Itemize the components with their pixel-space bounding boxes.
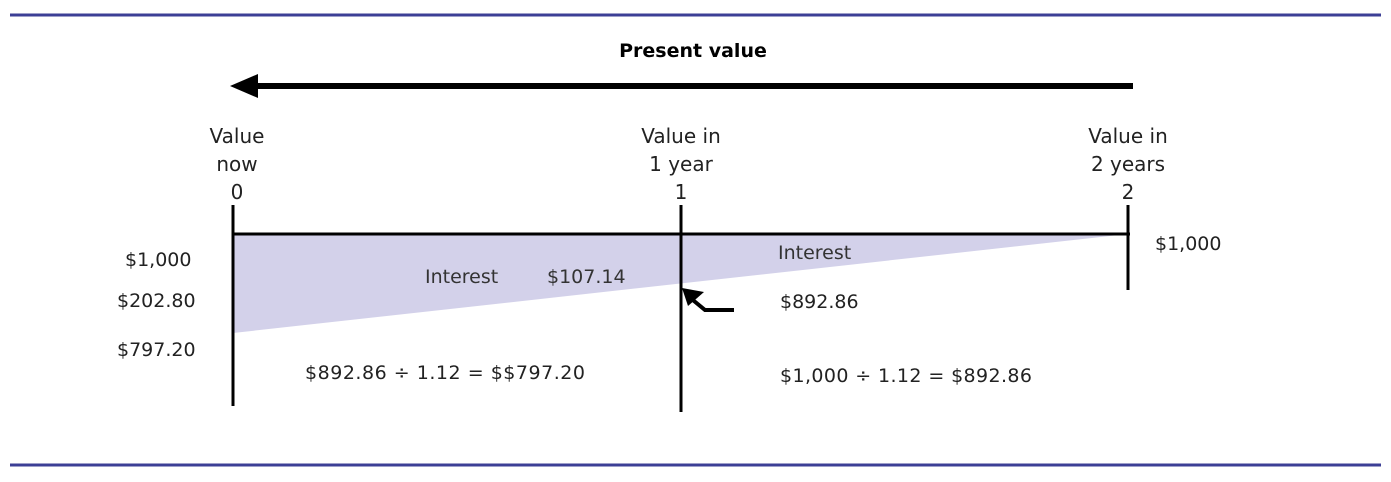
value labels: $1,000 ÷ 1.12 = $892.86 xyxy=(780,365,1032,387)
column labels: now xyxy=(216,152,258,176)
column labels: 2 xyxy=(1122,180,1134,204)
value labels: $107.14 xyxy=(547,266,626,288)
timeline axis xyxy=(233,205,1130,412)
value labels: Interest xyxy=(778,242,851,264)
column labels: 0 xyxy=(231,180,243,204)
value labels: $892.86 ÷ 1.12 = $$797.20 xyxy=(305,362,585,384)
value labels: $797.20 xyxy=(117,339,196,361)
value labels: Interest xyxy=(425,266,498,288)
column labels: Value in xyxy=(641,124,721,148)
value labels: $1,000 xyxy=(1155,233,1221,255)
value labels: $202.80 xyxy=(117,290,196,312)
shaded interest area xyxy=(233,234,1128,333)
title: Present value xyxy=(619,40,767,62)
column labels: 1 xyxy=(675,180,687,204)
value labels: $892.86 xyxy=(780,291,859,313)
column labels: Value in xyxy=(1088,124,1168,148)
column labels: 1 year xyxy=(649,152,714,176)
value labels: $1,000 xyxy=(125,249,191,271)
column labels: 2 years xyxy=(1091,152,1165,176)
arrow: present value direction xyxy=(230,74,1133,98)
small arrow pointing to $892.86 xyxy=(682,288,734,310)
column labels: Value xyxy=(210,124,264,148)
value labels xyxy=(117,233,1221,387)
column labels xyxy=(210,124,1168,204)
